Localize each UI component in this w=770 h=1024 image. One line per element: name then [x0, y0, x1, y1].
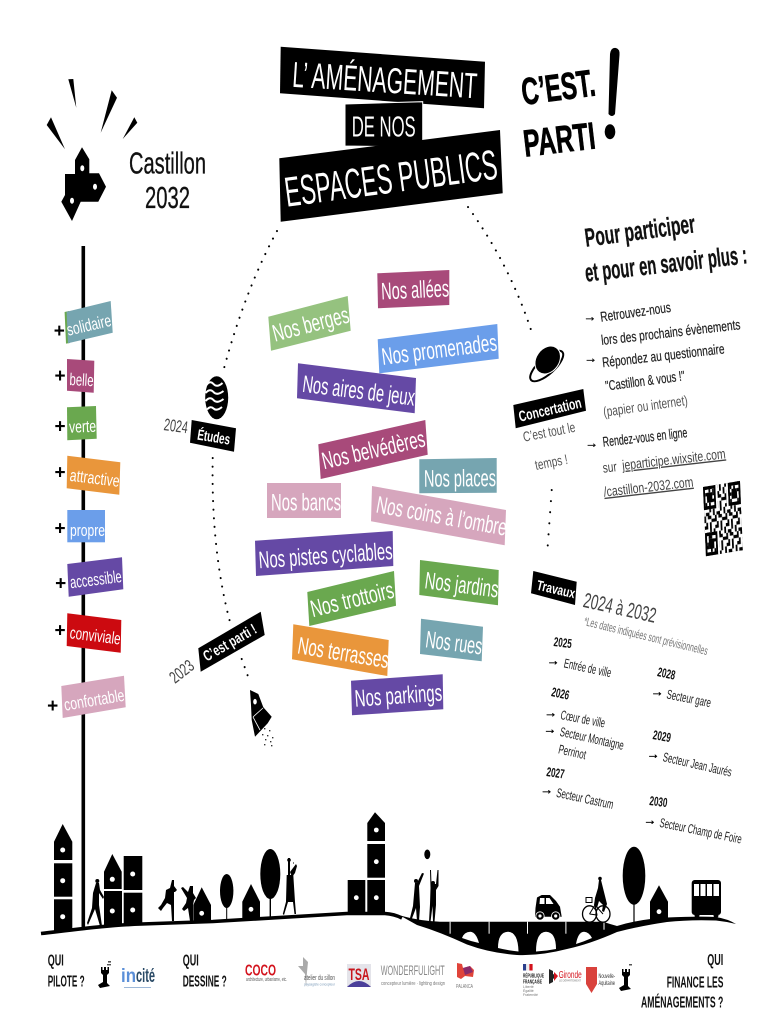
- phase: Études 2024: 2024: [163, 415, 189, 437]
- logo: castle emblem: [619, 964, 632, 991]
- tag: accessible: accessible: [69, 567, 123, 592]
- logo: Gironde: [549, 969, 582, 984]
- plus signs: +: [54, 518, 66, 539]
- children playing: [158, 880, 196, 921]
- text block: ways to participate: →: [584, 309, 596, 324]
- plus signs: +: [54, 463, 66, 484]
- text block: works schedule: Secteur gare: [665, 687, 712, 710]
- heading: C'est parti !: [519, 48, 620, 166]
- tag: Nos allées: [377, 270, 450, 308]
- tag: belle: belle: [69, 370, 94, 390]
- tag: Nos trottoirs: [307, 571, 397, 626]
- logo: TSA: [347, 964, 371, 987]
- tag: attractive: [67, 456, 121, 495]
- text block: works schedule: 2027: [546, 764, 565, 781]
- tag: Nos bancs: [267, 483, 341, 518]
- plus signs: +: [54, 366, 66, 387]
- tag: verte: verte: [69, 417, 96, 437]
- tag: Nos places: [419, 458, 497, 493]
- tag: Nos jardins: Nos jardins: [423, 567, 500, 604]
- heading: C'est parti !: C’EST.: [519, 63, 598, 114]
- plus signs: +: [54, 417, 66, 438]
- tag: conviviale: [67, 613, 122, 653]
- phase: Concertation: C’est tout le: [522, 419, 577, 445]
- tag: Nos terrasses: [292, 624, 391, 676]
- tag: solidaire: solidaire: [65, 311, 113, 340]
- text block: ways to participate: /castillon-2032.com: [603, 474, 694, 500]
- text block: works schedule: →: [644, 812, 656, 828]
- logo: Gironde: Gironde: [559, 970, 582, 981]
- logo: COCO: COCO: [245, 963, 276, 980]
- logo: Nouvelle-Aquitaine: Nouvelle-: [598, 973, 615, 980]
- tag: Nos trottoirs: Nos trottoirs: [308, 577, 397, 623]
- panel: places cloud: [255, 270, 509, 715]
- house group: [104, 854, 142, 925]
- text block: works schedule: →: [647, 746, 660, 762]
- heading: Qui pilote ?: PILOTE ?: [48, 974, 85, 991]
- text block: ways to participate: Rendez-vous en ligne: [602, 424, 688, 450]
- logo: République française: Égalité: [523, 988, 534, 993]
- tag: Nos promenades: [378, 324, 499, 373]
- text block: works schedule: Entrée de ville: [563, 656, 613, 680]
- heading: Qui pilote ?: QUI: [48, 953, 64, 970]
- title: L'aménagement de nos espaces publics: [279, 47, 503, 222]
- plus signs: +: [55, 574, 66, 595]
- text block: works schedule: →: [544, 722, 556, 736]
- logo: Nouvelle-Aquitaine: [586, 967, 615, 993]
- heading: Qui dessine ?: DESSINE ?: [183, 974, 227, 991]
- bridge: [400, 916, 736, 955]
- tree, house and bus: [623, 847, 721, 922]
- text block: works schedule: 2025: [553, 634, 573, 651]
- logo: République française: Liberté: [523, 985, 534, 989]
- plus signs: [47, 321, 66, 717]
- phase: Études 2024: Études: [196, 427, 231, 449]
- logo: Gironde: LE DÉPARTEMENT: [559, 978, 581, 982]
- logo: Wonderfulight: [381, 962, 445, 987]
- skyline illustration: right: [400, 847, 736, 955]
- tag: Nos allées: Nos allées: [381, 275, 450, 305]
- heading: C'est parti !: PARTI: [521, 116, 598, 166]
- heading: Qui dessine ?: QUI: [183, 953, 199, 970]
- skyline illustration: left: [41, 812, 402, 934]
- QR code: [703, 481, 743, 556]
- tag: Nos terrasses: Nos terrasses: [296, 633, 391, 674]
- phase: Travaux 2024 à 2032: 2024 à 2032: [581, 589, 658, 628]
- tag: Nos places: Nos places: [424, 465, 496, 493]
- panel: values labels: [47, 301, 126, 718]
- walking person: [87, 879, 104, 926]
- phase: C'est parti ! 2023: 2023: [166, 656, 198, 687]
- heading: Qui finance les aménagements ?: [641, 952, 724, 1011]
- tag: Nos promenades: Nos promenades: [380, 329, 499, 371]
- plus signs: +: [47, 696, 58, 717]
- text block: works schedule: →: [544, 705, 557, 720]
- logo: Castillon 2032: Castillon: [129, 145, 206, 180]
- tag: Nos berges: [268, 296, 352, 351]
- tag: belle: [67, 359, 94, 393]
- text block: works schedule: Cœur de ville: [559, 707, 606, 731]
- tag: Nos belvédères: Nos belvédères: [319, 426, 428, 475]
- text block: ways to participate: (papier ou internet): [602, 392, 689, 420]
- text block: works schedule: 2026: [550, 684, 571, 703]
- logo: Wonderfulight: WONDERFULIGHT: [381, 962, 445, 978]
- phase: Concertation: Concertation: [517, 395, 583, 426]
- tag: Nos belvédères: [318, 420, 428, 479]
- text block: works schedule: 2030: [649, 793, 668, 810]
- text block: works schedule: →: [547, 653, 560, 668]
- heading: Pour participer: Pour participer: [583, 208, 697, 253]
- vertical pole: [82, 246, 85, 928]
- heading: Qui dessine ?: [183, 953, 227, 991]
- logo: Castillon 2032: [47, 79, 206, 221]
- tag: Nos coins à l'ombre: [371, 486, 509, 545]
- logo: TSA: TSA: [348, 965, 370, 984]
- tag: Nos parkings: [351, 674, 443, 715]
- logo: République française: FRANÇAISE: [523, 980, 542, 986]
- logo: atelier du sillon: paysagiste concepteur: [304, 982, 336, 986]
- title: L'aménagement de nos espaces publics: ESPACES PUBLICS: [282, 141, 500, 216]
- tag: confortable: confortable: [63, 686, 126, 715]
- logo: Nouvelle-Aquitaine: Aquitaine: [598, 980, 615, 987]
- logo: République française: RÉPUBLIQUE: [523, 972, 544, 980]
- text block: ways to participate: "Castillon & vous !": [604, 367, 686, 394]
- woman with bouquet: [283, 858, 297, 915]
- tag: confortable: [61, 676, 126, 718]
- right towers: [348, 812, 385, 913]
- text block: works schedule: 2029: [652, 727, 672, 745]
- text block: ways to participate: →: [585, 436, 598, 450]
- tag: Nos bancs: Nos bancs: [271, 490, 341, 517]
- text block: ways to participate: [584, 299, 741, 500]
- logo: Palanca: [456, 963, 474, 990]
- phase: C'est parti ! 2023: [166, 612, 265, 687]
- tag: conviviale: conviviale: [69, 623, 122, 648]
- phase: Travaux 2024 à 2032: [531, 571, 709, 658]
- tag: solidaire: [65, 301, 113, 343]
- text block: ways to participate: jeparticipe.wixsite.com: [620, 445, 726, 473]
- tag: attractive: attractive: [69, 466, 121, 491]
- tag: propre: propre: [70, 521, 105, 540]
- houses and trees: [193, 849, 280, 922]
- logo: Wonderfulight: concepteur lumière · lighting design: [381, 981, 445, 987]
- tag: Nos parkings: Nos parkings: [354, 680, 443, 713]
- cyclist: [582, 877, 610, 922]
- logo: inCité: [121, 966, 155, 988]
- text block: works schedule: →: [651, 684, 664, 699]
- icon: striped planet: [205, 376, 228, 419]
- logo: atelier du sillon: [298, 957, 336, 987]
- text block: ways to participate: sur: [602, 458, 618, 476]
- logo: République française: Fraternité: [523, 993, 538, 997]
- tag: accessible: [67, 557, 123, 597]
- logo: République française: [523, 964, 544, 997]
- text block: works schedule: Secteur Castrum: [555, 785, 615, 812]
- ball players: [410, 850, 438, 922]
- logo: COCO: architecture, urbanisme, etc.: [246, 977, 287, 983]
- text block: ways to participate: →: [584, 350, 597, 366]
- icon: rocket: [250, 690, 273, 746]
- text block: ways to participate: Répondez au questionnaire: [601, 340, 725, 370]
- logo: castle emblem: [98, 961, 111, 988]
- icon: ringed planet: [526, 341, 568, 386]
- tag: Nos berges: Nos berges: [270, 302, 352, 348]
- car: [535, 895, 562, 920]
- phase: C'est parti ! 2023: C’est parti !: [200, 621, 260, 665]
- plus signs: +: [54, 321, 65, 342]
- heading: Qui finance les aménagements ?: QUI: [707, 952, 723, 969]
- tag: Nos aires de jeux: [297, 363, 416, 413]
- tag: Nos rues: Nos rues: [424, 626, 484, 660]
- tag: propre: [67, 510, 105, 542]
- logo: Castillon 2032: 2032: [145, 180, 190, 215]
- text block: works schedule: Perrinot: [557, 742, 588, 762]
- ground line: [41, 914, 402, 934]
- text block: works schedule: Secteur Montaigne: [559, 724, 625, 753]
- tag: Nos rues: [420, 619, 484, 661]
- dotted timeline path: [213, 207, 552, 677]
- title: L'aménagement de nos espaces publics: DE NOS: [352, 112, 416, 144]
- text block: works schedule: 2028: [656, 664, 677, 683]
- plus signs: +: [54, 620, 66, 641]
- tag: Nos aires de jeux: Nos aires de jeux: [301, 371, 416, 412]
- text block: works schedule: [540, 634, 743, 847]
- phase: Concertation: temps !: [534, 451, 569, 473]
- tower: [54, 824, 72, 931]
- logo: Palanca: PALANCA: [456, 984, 473, 990]
- tag: Nos pistes cyclables: [255, 531, 393, 576]
- tag: Nos jardins: [419, 560, 500, 605]
- logo: inCité: cité: [136, 966, 155, 987]
- logo: inCité: in: [121, 966, 136, 987]
- tag: Nos pistes cyclables: Nos pistes cyclables: [258, 538, 393, 574]
- phase: Études 2024: [163, 415, 236, 452]
- title: L'aménagement de nos espaces publics: L’ AMÉNAGEMENT: [291, 54, 478, 106]
- tag: Nos coins à l'ombre: Nos coins à l’ombre: [374, 492, 509, 542]
- heading: Qui pilote ?: [48, 953, 85, 991]
- logo: atelier du sillon: atelier du sillon: [304, 975, 335, 982]
- tag: verte: [67, 406, 97, 440]
- text block: works schedule: →: [540, 782, 553, 797]
- phase: Travaux 2024 à 2032: Travaux: [535, 577, 577, 601]
- text block: ways to participate: Retrouvez-nous: [599, 299, 672, 325]
- phase: Concertation: [513, 389, 586, 473]
